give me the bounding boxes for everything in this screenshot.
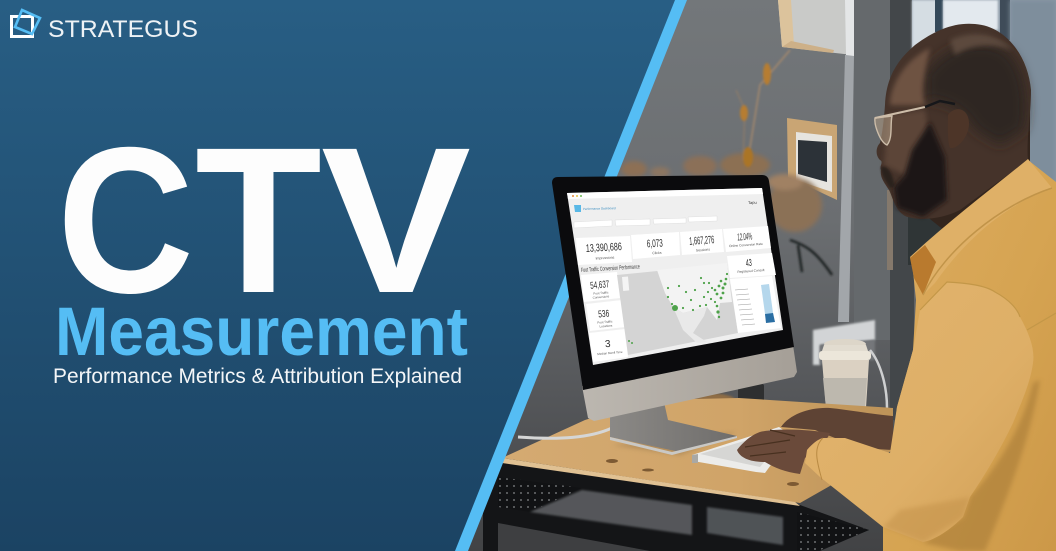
card: clicks: Clicks [652,251,662,255]
face cheek [884,110,928,175]
card: median dwell: Median Dwell Time [597,350,623,356]
logo mark [12,10,40,36]
subtitle: Performance Metrics & Attribution Explained [53,365,462,388]
card: foot traffic locations: Locations [599,323,613,329]
card: conversion rate [723,226,771,252]
card: conversion rate: Online Conversion Rate [729,242,763,248]
dashboard screen [567,188,783,365]
inner collar fold [910,245,936,295]
title: CTV: C [57,105,194,337]
card: registered: 43 [745,258,752,269]
dashboard header: Performance Dashboard [583,206,616,211]
glasses [875,101,955,145]
monitor bezel [552,175,794,390]
logo [12,10,198,43]
title: CTV: T [195,105,322,337]
collar [910,159,1052,295]
wall socket and cable [813,320,887,408]
card: foot traffic conversions: Foot Traffic [593,290,609,296]
card: foot traffic conversions: Conversions [592,294,610,300]
section heading: Foot Traffic Conversion Performance [581,264,640,274]
keyboard [692,427,792,473]
shoulder seam [920,282,1056,330]
wall frame: top [778,0,854,56]
monitor chin [582,345,797,421]
lips and chin [881,167,895,188]
heading: Measurement: Measurement [55,293,468,370]
head [877,24,1031,219]
card: foot traffic locations: 536 [598,309,610,320]
dried plants [621,50,832,275]
hair stubble [925,43,1027,145]
monitor stand [610,402,737,455]
map [617,263,738,355]
card: impressions: Impressions [595,255,615,260]
forehead highlight [890,48,930,105]
monitor cable [518,428,612,438]
card: sessions [680,229,724,255]
card: median dwell [589,329,628,362]
ear [948,109,969,148]
card: foot traffic locations [586,300,625,331]
card: clicks: 6,073 [647,238,663,250]
card: median dwell: 3 [605,339,611,350]
card: registered [727,253,776,278]
cuff seam [817,438,823,480]
card: sessions: Sessions [696,247,710,252]
photo background: wall and window [440,0,1056,551]
jacket body shadow [923,380,1040,551]
card: registered: Registered Consult [737,268,765,274]
dashboard header [574,200,757,212]
card: foot traffic conversions [581,272,620,302]
card: clicks [631,232,680,259]
desk top [502,398,893,506]
dashboard filters [574,216,717,228]
dashboard header: Tapu [748,200,757,205]
small dark object behind monitor [675,384,764,408]
title: CTV: V [321,105,471,337]
beard [894,122,947,217]
wall frame: lower [787,118,837,200]
top of head highlight [950,34,1012,55]
logo wordmark: STRATEGUS [48,16,198,43]
card: impressions [576,236,632,265]
data table [730,276,781,333]
person [805,24,1056,551]
monitor [552,175,797,421]
card: conversion rate: 12.04% [737,231,753,244]
card: sessions: 1,667,276 [689,234,715,248]
jacket body [883,160,1056,551]
card: impressions: 13,390,686 [586,241,622,255]
sleeve underside shadow [883,497,970,542]
sleeve [805,282,1033,542]
blue diagonal stripe [455,0,687,551]
desk frame [483,455,869,551]
card: foot traffic locations: Foot Traffic [597,319,613,325]
coffee cup [819,339,871,408]
hands [737,408,893,474]
left panel [0,0,677,551]
neck [925,110,1030,235]
card: foot traffic conversions: 54,637 [590,279,610,292]
